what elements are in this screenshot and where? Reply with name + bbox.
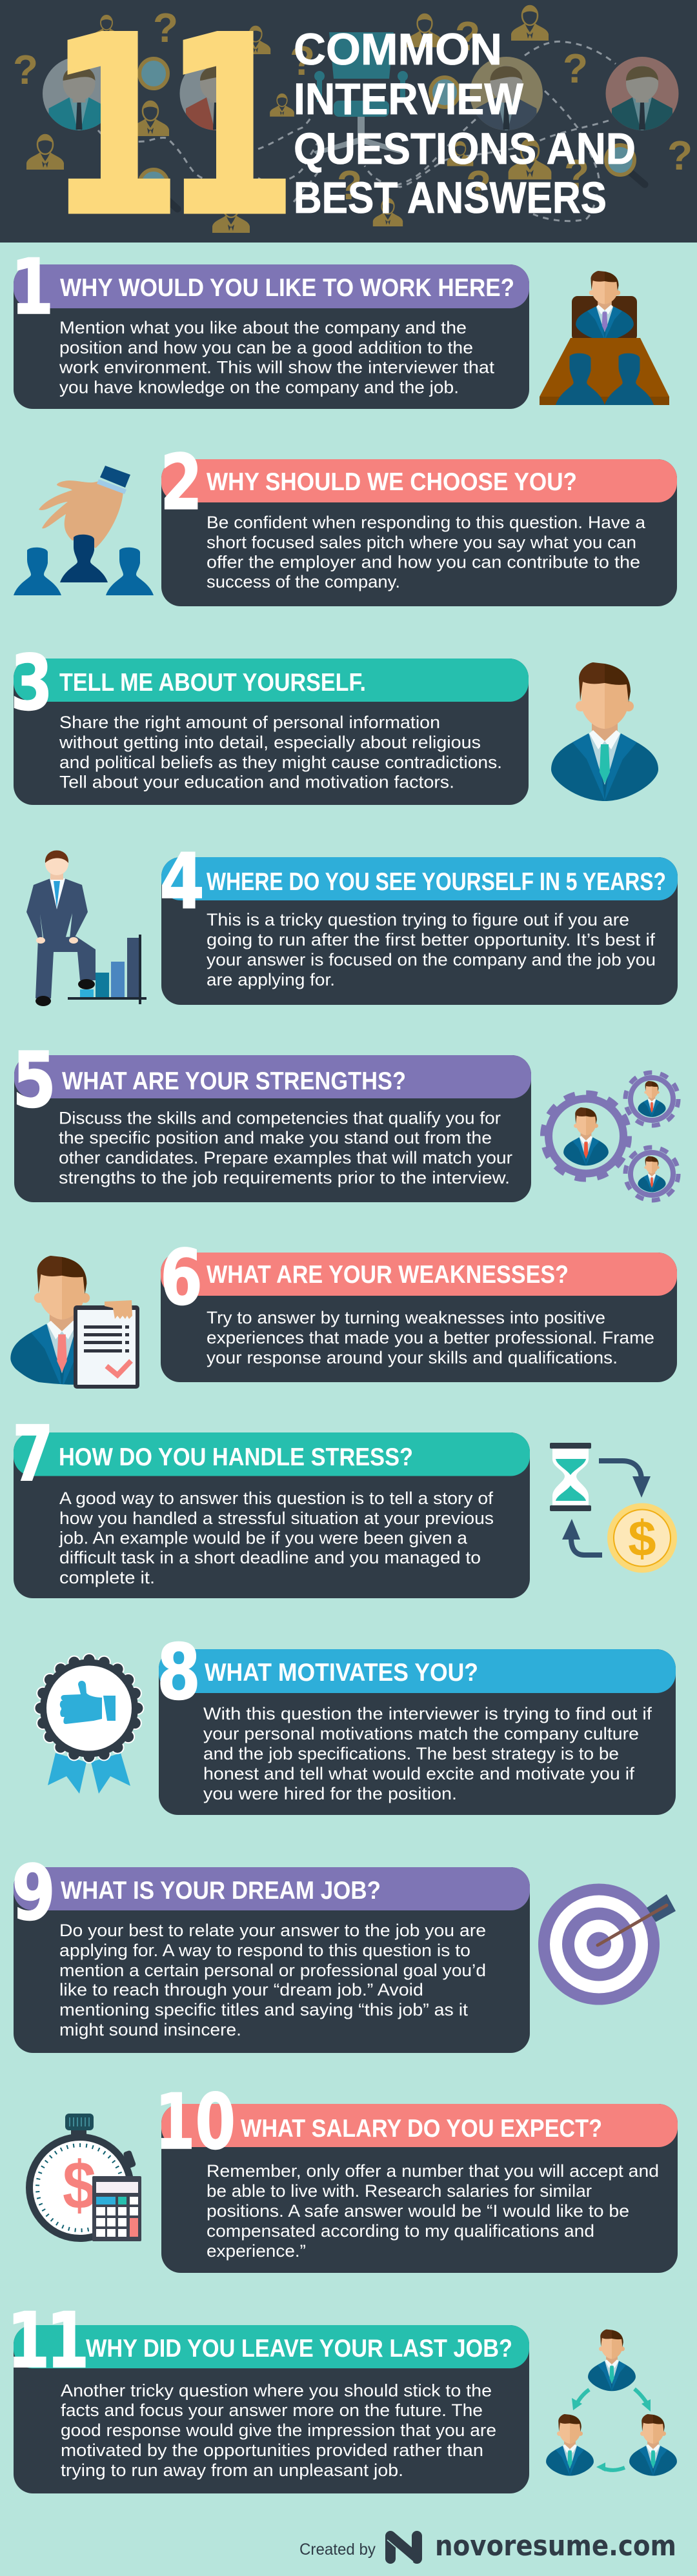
header outline people — [26, 6, 551, 233]
panel: question 1 — [10, 243, 529, 409]
header question marks: ? — [466, 162, 491, 208]
question 1 answer: position and how you can be a good addition to the — [59, 338, 473, 357]
header question marks: ? — [337, 162, 362, 208]
question 2 answer — [207, 513, 646, 591]
icon: stopwatch with calculator: $ — [63, 2148, 96, 2223]
panel: question 10 — [155, 2078, 678, 2273]
question 5 heading: WHAT ARE YOUR STRENGTHS? — [62, 1067, 406, 1095]
question 5 answer: Discuss the skills and competencies that qualify you for — [59, 1108, 501, 1127]
icon: people in gears — [543, 1073, 678, 1200]
question 6 answer — [207, 1308, 654, 1367]
question 2 answer: Be confident when responding to this question. Have a — [207, 513, 646, 532]
header question marks: ? — [667, 132, 692, 179]
question 11 answer: good response would give the impression that you are — [61, 2421, 496, 2440]
header question marks: ? — [13, 46, 38, 93]
panel: question 8 — [157, 1629, 676, 1815]
question 11 answer — [61, 2381, 496, 2480]
question 1 answer — [59, 318, 495, 397]
number 2: 2 — [160, 439, 203, 528]
icon: target with arrow — [538, 1883, 676, 2005]
question 11 answer: facts and focus your answer more on the future. The — [61, 2401, 483, 2420]
question 6 heading bar — [161, 1253, 677, 1296]
question 4 answer: This is a tricky question trying to figure out if you are — [207, 910, 629, 929]
header magnifiers — [139, 59, 645, 209]
question 9 answer: mention a certain personal or professional goal you’d — [59, 1961, 486, 1980]
number 11: 11 — [6, 2295, 90, 2386]
question 7 answer: A good way to answer this question is to tell a story of — [59, 1489, 494, 1508]
question 3 heading bar — [14, 659, 529, 702]
number 4: 4 — [159, 838, 205, 927]
question 8 answer: your personal motivations match the company culture — [203, 1724, 639, 1743]
question 8 answer — [203, 1704, 652, 1803]
header chair — [313, 32, 409, 155]
question 2 heading: WHY SHOULD WE CHOOSE YOU? — [207, 468, 577, 496]
question 11 answer: Another tricky question where you should stick to the — [61, 2381, 492, 2401]
question 1 heading bar — [14, 264, 529, 308]
question 3 heading: TELL ME ABOUT YOURSELF. — [59, 669, 366, 697]
question 5 answer — [59, 1108, 512, 1187]
question 2 answer: success of the company. — [207, 572, 400, 591]
question 7 answer: complete it. — [59, 1568, 155, 1587]
question 1 answer: Mention what you like about the company and the — [59, 318, 467, 337]
header question marks — [13, 5, 692, 208]
header question marks: ? — [564, 151, 589, 197]
question 5 heading bar — [14, 1055, 531, 1098]
icon: hourglass and coin cycle — [550, 1443, 677, 1572]
icon: man stepping on bar chart — [26, 850, 146, 1006]
question 4 answer: going to run after the first better opportunity. It’s best if — [207, 930, 656, 949]
header question marks: ? — [455, 13, 480, 59]
question 4 answer — [207, 910, 656, 989]
question 8 answer: With this question the interviewer is trying to find out if — [203, 1704, 652, 1723]
question 10 answer: be able to live with. Research salaries for similar — [207, 2181, 592, 2201]
created by label: Created by — [299, 2541, 376, 2559]
number 3: 3 — [10, 639, 53, 728]
number 10: 10 — [155, 2078, 236, 2167]
question 9 answer: Do your best to relate your answer to the job you are — [59, 1921, 486, 1940]
question 4 answer: are applying for. — [207, 970, 335, 989]
question 6 answer: experiences that made you a better professional. Frame — [207, 1328, 654, 1347]
question 5 answer: strengths to the job requirements prior to the interview. — [59, 1168, 510, 1187]
question 11 heading bar — [14, 2325, 529, 2368]
question 7 answer — [59, 1489, 494, 1587]
header question marks: ? — [563, 45, 588, 92]
question 9 answer: like to reach through your “dream job.” Avoid — [59, 1980, 423, 1999]
icon: man holding checklist — [10, 1256, 139, 1389]
question 9 answer: applying for. A way to respond to this question is to — [59, 1941, 470, 1960]
question 1 answer: work environment. This will show the interviewer that — [59, 357, 495, 377]
question 7 answer: job. An example would be if you were been given a — [59, 1529, 468, 1548]
question 10 answer: experience.” — [207, 2241, 306, 2261]
headline: BEST ANSWERS — [294, 173, 607, 223]
question 2 heading bar — [161, 459, 677, 502]
question 11 answer: motivated by the opportunities provided rather than — [61, 2441, 483, 2460]
question 10 answer: positions. A safe answer would be “I would like to be — [207, 2201, 629, 2221]
question 6 answer: Try to answer by turning weaknesses into positive — [207, 1308, 605, 1327]
question 10 heading bar — [161, 2104, 678, 2147]
question 8 answer: you were hired for the position. — [203, 1784, 457, 1803]
question 7 heading bar — [14, 1432, 530, 1476]
question 1 heading: WHY WOULD YOU LIKE TO WORK HERE? — [60, 274, 514, 302]
question 7 answer: how you handled a stressful situation at your previous — [59, 1509, 494, 1528]
number 7: 7 — [12, 1410, 54, 1499]
icon: hourglass and coin cycle: $ — [628, 1510, 656, 1567]
panel: question 4 — [159, 838, 678, 1005]
question 3 answer: and political beliefs as they might cause contradictions. — [59, 753, 502, 772]
question 2 answer: offer the employer and how you can contribute to the — [207, 552, 640, 571]
header banner — [0, 0, 697, 243]
panel: question 7 — [12, 1410, 530, 1598]
icon: stopwatch with calculator — [26, 2114, 141, 2242]
panel: question 6 — [160, 1234, 677, 1382]
headline: QUESTIONS AND — [294, 124, 636, 173]
question 10 answer — [207, 2161, 659, 2261]
question 7 heading: HOW DO YOU HANDLE STRESS? — [59, 1443, 413, 1471]
headline: COMMON — [294, 25, 502, 74]
panel: question 3 — [10, 639, 529, 805]
question 6 answer: your response around your skills and qualifications. — [207, 1348, 618, 1367]
question 3 answer: Share the right amount of personal information — [59, 713, 440, 732]
question 5 answer: the specific position and make you stand out from the — [59, 1128, 492, 1147]
question 3 answer — [59, 713, 502, 792]
question 2 answer: short focused sales pitch where you say what you can — [207, 533, 636, 552]
number 8: 8 — [157, 1629, 201, 1718]
question 5 answer: other candidates. Prepare examples that will match your — [59, 1148, 512, 1167]
number 1: 1 — [10, 243, 54, 332]
icon: interviewer at desk — [540, 271, 669, 405]
header question marks: ? — [290, 37, 315, 84]
question 4 heading bar — [161, 857, 678, 900]
question 3 answer: Tell about your education and motivation factors. — [59, 773, 454, 792]
question 7 answer: difficult task in a short deadline and you managed to — [59, 1548, 481, 1567]
header dashed connectors — [98, 41, 616, 221]
headline: INTERVIEW — [294, 74, 524, 124]
question 8 answer: and the job specifications. The best strategy is to be — [203, 1744, 619, 1763]
panel: question 5 — [12, 1036, 531, 1202]
panel: question 9 — [12, 1849, 530, 2053]
question 9 heading: WHAT IS YOUR DREAM JOB? — [61, 1877, 381, 1905]
question 3 answer: without getting into detail, especially about religious — [59, 733, 481, 752]
question 9 answer: might sound insincere. — [59, 2020, 241, 2039]
question 11 heading: WHY DID YOU LEAVE YOUR LAST JOB? — [86, 2335, 512, 2363]
header question marks: ? — [153, 5, 178, 51]
number 9: 9 — [12, 1849, 56, 1938]
question 11 answer: trying to run away from an unpleasant job. — [61, 2461, 403, 2480]
question 4 answer: your answer is focused on the company and the job you — [207, 950, 656, 969]
icon: thumbs-up award badge — [40, 1659, 138, 1794]
logo: N mark — [387, 2536, 417, 2562]
question 8 heading bar — [159, 1649, 676, 1693]
panel: question 2 — [160, 439, 677, 606]
icon: three people in cycle — [546, 2330, 677, 2476]
question 1 answer: you have knowledge on the company and the job. — [59, 378, 459, 397]
number 6: 6 — [160, 1234, 203, 1323]
question 8 answer: honest and tell what would excite and motivate you if — [203, 1764, 635, 1783]
question 6 heading: WHAT ARE YOUR WEAKNESSES? — [207, 1261, 569, 1289]
question 10 answer: compensated according to my qualifications and — [207, 2221, 594, 2241]
question 9 answer — [59, 1921, 486, 2039]
header ovals with busts — [43, 57, 679, 136]
icon: hand choosing candidate — [14, 466, 154, 595]
question 9 heading bar — [14, 1867, 530, 1910]
question 10 heading: WHAT SALARY DO YOU EXPECT? — [241, 2115, 602, 2143]
number 5: 5 — [12, 1036, 56, 1125]
question 9 answer: mentioning specific titles and saying “this job” as it — [59, 2000, 469, 2019]
question 10 answer: Remember, only offer a number that you will accept and — [207, 2161, 659, 2181]
headline — [294, 25, 636, 223]
panel: question 11 — [6, 2295, 529, 2493]
footer credit — [299, 2530, 676, 2562]
question 8 heading: WHAT MOTIVATES YOU? — [205, 1659, 478, 1687]
icon: businessman bust — [551, 662, 658, 801]
